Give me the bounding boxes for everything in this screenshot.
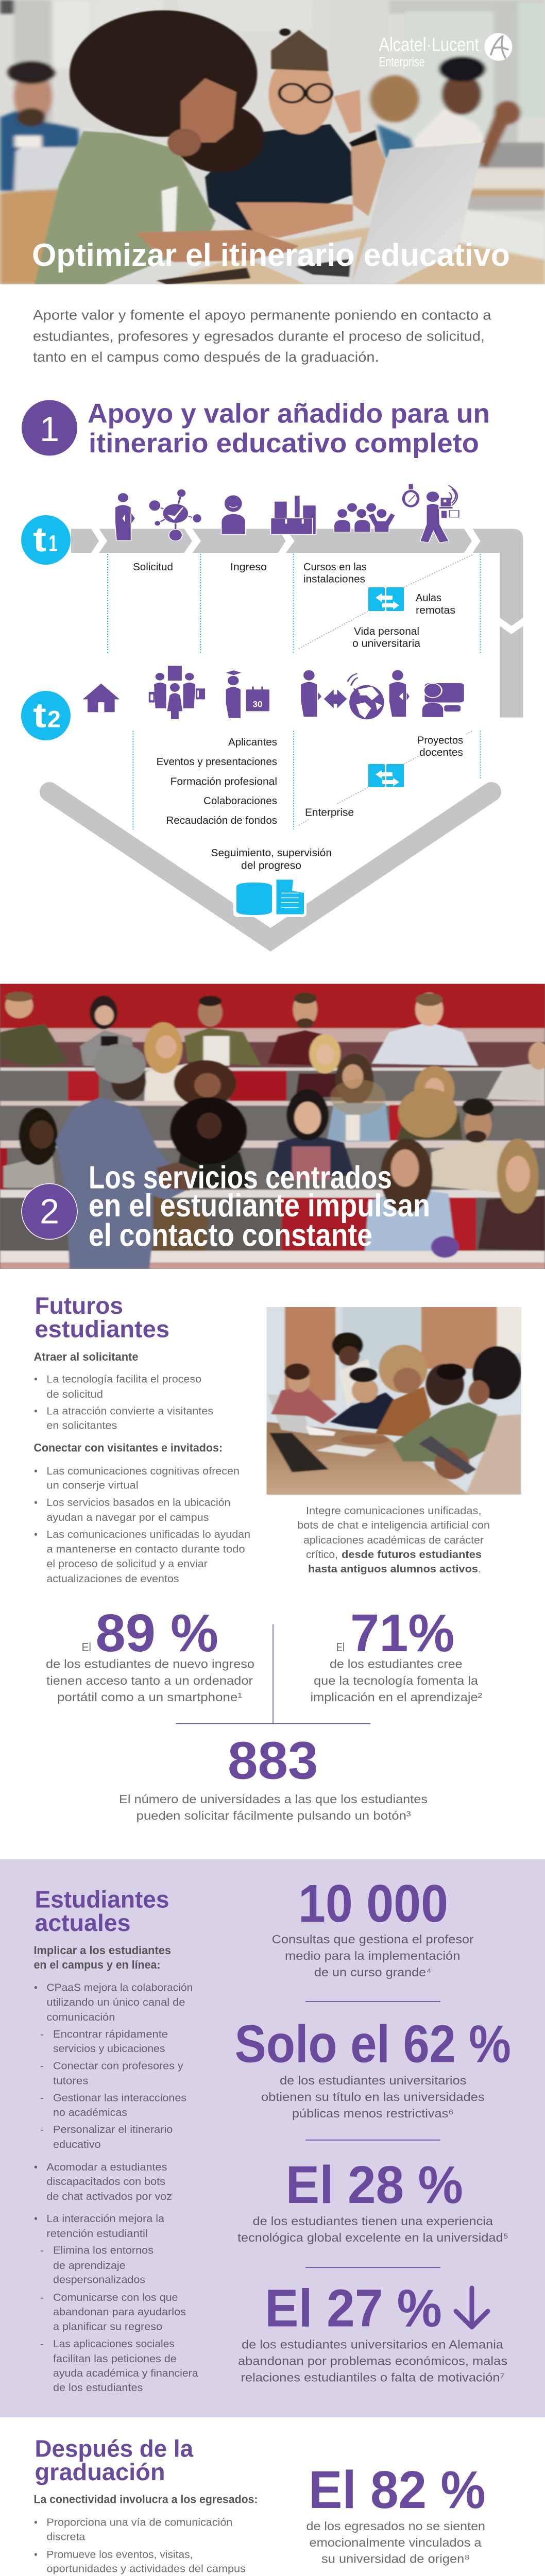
stat: 883: pueden solicitar fácilmente pulsando un botón³ bbox=[136, 1809, 411, 1822]
title: Optimizar el itinerario educativo bbox=[32, 238, 510, 273]
bullet list: connect: actualizaciones de eventos bbox=[46, 1573, 179, 1585]
bullet list: current students: - bbox=[40, 2292, 44, 2303]
icon: exchange (enterprise / teaching projects) bbox=[368, 764, 404, 787]
t2 stage labels: Recaudación de fondos bbox=[166, 815, 277, 826]
stat: el 82 %: El 82 % bbox=[309, 2460, 486, 2519]
bullet list: current students: Comunicarse con los que bbox=[53, 2292, 178, 2303]
bullet list: current students: - bbox=[40, 2061, 44, 2072]
photo caption: hasta antiguos alumnos activos bbox=[308, 1564, 478, 1575]
bullet list: current students: Elimina los entornos bbox=[53, 2245, 154, 2257]
heading: futuros estudiantes: estudiantes bbox=[35, 1316, 169, 1343]
bullet list: current students: tutores bbox=[53, 2076, 88, 2087]
icon: database and document bbox=[233, 878, 306, 917]
stat: el 27 % bbox=[238, 2279, 507, 2384]
bullet list: current students: ayuda académica y financiera bbox=[53, 2368, 199, 2379]
logo: Alcatel-Lucent Enterprise (header): Alcatel·Lucent bbox=[379, 34, 480, 55]
bullet list: current students: Las aplicaciones sociales bbox=[53, 2338, 175, 2350]
t1 stage labels: Aulas bbox=[416, 592, 441, 604]
stat: el 27 %: de los estudiantes universitarios en Alemania bbox=[242, 2338, 503, 2351]
stat: 10 000: de un curso grande⁴ bbox=[314, 1965, 432, 1979]
dotted guides bbox=[108, 554, 480, 829]
stat: el 82 % bbox=[306, 2460, 486, 2566]
stat: solo el 62 %: de los estudiantes universitarios bbox=[280, 2074, 467, 2087]
bullet list: connect: un conserje virtual bbox=[46, 1480, 139, 1492]
bullet list: attract: • bbox=[34, 1374, 38, 1385]
bullet list: connect: Las comunicaciones cognitivas ofrecen bbox=[46, 1466, 240, 1477]
stat: 89 %: 89 % bbox=[96, 1603, 218, 1663]
t2 icons row bbox=[82, 666, 464, 719]
bullet list: attract: La tecnología facilita el proceso bbox=[46, 1374, 201, 1385]
stat: 89 %: El bbox=[81, 1640, 91, 1654]
bullet list: connect: • bbox=[34, 1497, 38, 1509]
stat: 71 %: 71% bbox=[350, 1603, 454, 1663]
bullet list: current students: Conectar con profesores y bbox=[53, 2061, 183, 2072]
t1 stage labels bbox=[133, 562, 455, 650]
stat: 10 000: medio para la implementación bbox=[285, 1949, 460, 1962]
bullet list: current students: Gestionar las interacciones bbox=[53, 2093, 186, 2104]
bullet list: current students: de chat activados por voz bbox=[46, 2191, 172, 2202]
photo caption: crítico, bbox=[306, 1549, 338, 1561]
t2 stage labels: Colaboraciones bbox=[203, 795, 277, 807]
bullet list: current students: • bbox=[34, 2162, 38, 2173]
heading: estudiantes actuales: actuales bbox=[35, 1909, 131, 1936]
t2 stage labels: del progreso bbox=[241, 860, 301, 872]
photo: group around a table bbox=[267, 1307, 521, 1495]
bullet list: attract: • bbox=[34, 1406, 38, 1417]
intro text: estudiantes, profesores y egresados durante el proceso de solicitud, bbox=[33, 329, 485, 344]
calendar date on icon: 30 bbox=[253, 700, 262, 709]
bullet list: connect: a mantenerse en contacto durante todo bbox=[46, 1544, 245, 1555]
bullet list: connectivity: Promueve los eventos, visitas, bbox=[46, 2549, 193, 2561]
t1 stage labels: Vida personal bbox=[354, 626, 419, 637]
section 2 heading: en el estudiante impulsan bbox=[89, 1188, 430, 1224]
bullet list: connect: Los servicios basados en la ubicación bbox=[46, 1497, 230, 1509]
bullet list: current students: - bbox=[40, 2338, 44, 2350]
t1 icons row bbox=[115, 484, 459, 543]
heading: despues de la graduacion bbox=[35, 2435, 193, 2485]
bullet list: current students: - bbox=[40, 2029, 44, 2040]
stat: el 27 %: relaciones estudiantiles o falta de motivación⁷ bbox=[241, 2371, 505, 2384]
section 1 heading: Apoyo y valor añadido para un bbox=[88, 399, 490, 429]
stat: el 82 %: de los egresados no se sienten bbox=[306, 2519, 485, 2533]
section 1 number badge: 1 bbox=[40, 410, 59, 449]
heading: estudiantes actuales bbox=[35, 1886, 169, 1936]
section 2 number badge: 2 bbox=[40, 1192, 59, 1231]
stat: 71 %: implicación en el aprendizaje² bbox=[310, 1690, 482, 1704]
section 1 heading bbox=[88, 399, 490, 459]
section 2 photo: lecture hall bbox=[0, 984, 545, 1269]
logo: Alcatel-Lucent Enterprise (header) bbox=[379, 33, 512, 70]
bullet list: connectivity: Proporciona una vía de comunicación bbox=[46, 2517, 232, 2529]
stat: 89 %: de los estudiantes de nuevo ingreso bbox=[46, 1657, 254, 1670]
stat: solo el 62 %: Solo el 62 % bbox=[235, 2014, 511, 2073]
t1 marker: 1 bbox=[48, 530, 58, 556]
photo caption bbox=[297, 1505, 490, 1575]
photo caption: . bbox=[478, 1564, 481, 1575]
section 2 heading: el contacto constante bbox=[89, 1218, 372, 1253]
bullet list: current students: educativo bbox=[53, 2139, 101, 2150]
bullet list: current students: Personalizar el itinerario bbox=[53, 2124, 173, 2136]
bullet list: current students: • bbox=[34, 2213, 38, 2225]
stat: 71 %: El bbox=[336, 1640, 345, 1654]
intro text: tanto en el campus como después de la graduación. bbox=[33, 349, 379, 365]
stat: 10 000: 10 000 bbox=[298, 1874, 448, 1933]
subheading: engage students: en el campus y en línea: bbox=[34, 1958, 161, 1971]
bullet list: current students: - bbox=[40, 2245, 44, 2257]
heading: despues de la graduacion: graduación bbox=[35, 2459, 165, 2485]
section 2 number badge bbox=[22, 1184, 77, 1240]
bullet list: connect: • bbox=[34, 1466, 38, 1477]
bullet list: current students: retención estudiantil bbox=[46, 2228, 148, 2240]
bullet list: connect bbox=[34, 1466, 250, 1585]
stat: 89 %: portátil como a un smartphone¹ bbox=[57, 1690, 242, 1704]
subheading: connect: Conectar con visitantes e invitados: bbox=[34, 1442, 223, 1454]
stat: el 28 %: tecnológica global excelente en la universidad⁵ bbox=[237, 2231, 508, 2244]
t1 stage labels: instalaciones bbox=[303, 574, 365, 585]
bullet list: attract bbox=[34, 1374, 213, 1432]
bullet list: current students bbox=[34, 1982, 199, 2394]
hero photo: students at a laptop bbox=[0, 0, 545, 284]
stat: 71 %: de los estudiantes cree bbox=[330, 1657, 463, 1670]
bullet list: current students: - bbox=[40, 2093, 44, 2104]
t1 stage labels: remotas bbox=[416, 605, 455, 616]
section 1 heading: itinerario educativo completo bbox=[89, 428, 479, 459]
panel: despues de la graduacion text bbox=[34, 2435, 258, 2576]
t1 stage labels: Cursos en las bbox=[303, 562, 367, 573]
stat: el 28 %: de los estudiantes tienen una experiencia bbox=[252, 2214, 493, 2228]
t2 marker: 2 bbox=[47, 706, 61, 733]
t2 stage labels: Formación profesional bbox=[171, 776, 277, 787]
panel: futuros estudiantes text bbox=[34, 1292, 250, 1585]
t1 stage labels: o universitaria bbox=[352, 638, 421, 650]
bullet list: current students: de aprendizaje bbox=[53, 2260, 126, 2272]
t2 marker bbox=[21, 691, 71, 740]
subheading: engage students: Implicar a los estudiantes bbox=[34, 1944, 171, 1957]
bullet list: current students: facilitan las peticiones de bbox=[53, 2353, 177, 2365]
journey band: chevron path with V return bbox=[49, 529, 523, 940]
stat: 10 000 bbox=[272, 1874, 474, 1979]
stat: solo el 62 % bbox=[235, 2014, 511, 2120]
t2 stage labels: Seguimiento, supervisión bbox=[211, 848, 332, 859]
section 1 number badge bbox=[22, 400, 77, 455]
bullet list: connect: ayudan a navegar por el campus bbox=[46, 1512, 209, 1523]
intro text: Aporte valor y fomente el apoyo permanente poniendo en contacto a bbox=[33, 307, 492, 323]
stat: 71 % bbox=[310, 1603, 482, 1704]
stat: 89 %: tienen acceso tanto a un ordenador bbox=[46, 1674, 253, 1687]
stat: 10 000: Consultas que gestiona el profesor bbox=[272, 1933, 474, 1946]
bullet list: current students: servicios y ubicaciones bbox=[53, 2043, 165, 2055]
subheading: attract applicant: Atraer al solicitante bbox=[34, 1350, 138, 1363]
bullet list: attract: en solicitantes bbox=[46, 1420, 117, 1432]
t1 marker: t bbox=[33, 520, 46, 559]
bullet list: current students: comunicación bbox=[46, 2012, 115, 2023]
stat: 71 %: que la tecnología fomenta la bbox=[314, 1674, 478, 1687]
stat: 883 bbox=[119, 1731, 428, 1822]
subheading: engage students bbox=[34, 1944, 171, 1971]
heading: estudiantes actuales: Estudiantes bbox=[35, 1886, 169, 1913]
photo caption: Integre comunicaciones unificadas, bbox=[306, 1505, 481, 1517]
bullet list: connectivity: oportunidades y actividades del campus bbox=[46, 2564, 246, 2575]
section 2 heading bbox=[89, 1160, 430, 1253]
bullet list: connectivity bbox=[34, 2517, 246, 2575]
photo caption: aplicaciones académicas de carácter bbox=[303, 1535, 484, 1546]
t2 stage labels bbox=[157, 735, 463, 872]
stat: 883: El número de universidades a las que los estudiantes bbox=[119, 1792, 428, 1806]
stat: 89 % bbox=[46, 1603, 254, 1704]
bullet list: connect: • bbox=[34, 1529, 38, 1540]
bullet list: current students: discapacitados con bots bbox=[46, 2176, 165, 2188]
bullet list: current students: CPaaS mejora la colaboración bbox=[46, 1982, 193, 1994]
subheading: connectivity: La conectividad involucra a los egresados: bbox=[34, 2493, 258, 2506]
arrow: down bbox=[456, 2288, 488, 2327]
t1 stage labels: Solicitud bbox=[133, 562, 173, 573]
bullet list: attract: La atracción convierte a visitantes bbox=[46, 1406, 213, 1417]
stat: solo el 62 %: obtienen su título en las universidades bbox=[261, 2090, 485, 2104]
section 2 heading: Los servicios centrados bbox=[89, 1160, 392, 1195]
heading: futuros estudiantes: Futuros bbox=[35, 1292, 123, 1319]
t1 stage labels: Ingreso bbox=[230, 562, 267, 573]
bullet list: connect: el proceso de solicitud y a enviar bbox=[46, 1558, 208, 1570]
photo caption: desde futuros estudiantes bbox=[342, 1549, 482, 1561]
heading: despues de la graduacion: Después de la bbox=[35, 2435, 193, 2462]
t2 stage labels: Aplicantes bbox=[228, 737, 277, 748]
stat: el 82 %: su universidad de origen⁸ bbox=[321, 2552, 470, 2566]
t2 stage labels: Proyectos bbox=[417, 735, 463, 746]
bullet list: current students: a planificar su regreso bbox=[53, 2321, 162, 2333]
logo: Alcatel-Lucent Enterprise (header): Enterprise bbox=[379, 55, 424, 70]
stat: el 27 %: abandonan por problemas económicos, malas bbox=[238, 2354, 507, 2367]
bullet list: connect: Las comunicaciones unificadas lo ayudan bbox=[46, 1529, 250, 1540]
stat: 883: 883 bbox=[228, 1731, 318, 1790]
panel: estudiantes actuales bbox=[0, 1859, 545, 2417]
bullet list: current students: utilizando un único canal de bbox=[46, 1997, 185, 2008]
stat: el 82 %: emocionalmente vinculados a bbox=[309, 2536, 482, 2549]
intro text bbox=[33, 307, 492, 365]
bullet list: current students: • bbox=[34, 1982, 38, 1994]
bullet list: current students: abandonan para ayudarlos bbox=[53, 2307, 186, 2318]
stat: el 27 %: El 27 % bbox=[265, 2279, 442, 2338]
icon: remote classrooms exchange bbox=[368, 587, 404, 611]
bullet list: current students: Encontrar rápidamente bbox=[53, 2029, 168, 2040]
heading: futuros estudiantes bbox=[35, 1292, 169, 1343]
photo caption: bots de chat e inteligencia artificial con bbox=[297, 1520, 490, 1531]
t2 marker: t bbox=[33, 696, 46, 735]
t2 stage labels: Eventos y presentaciones bbox=[157, 756, 277, 768]
bullet list: attract: de solicitud bbox=[46, 1389, 103, 1400]
bullet list: current students: de los estudiantes bbox=[53, 2382, 143, 2394]
t2 stage labels: docentes bbox=[419, 747, 463, 758]
bullet list: current students: Acomodar a estudiantes bbox=[46, 2162, 167, 2173]
bullet list: current students: despersonalizados bbox=[53, 2274, 145, 2285]
bullet list: current students: La interacción mejora la bbox=[46, 2213, 165, 2225]
bullet list: connectivity: • bbox=[34, 2549, 38, 2561]
stat: solo el 62 %: públicas menos restrictivas⁶ bbox=[292, 2107, 454, 2120]
stat: el 28 %: El 28 % bbox=[286, 2155, 463, 2214]
bullet list: current students: - bbox=[40, 2124, 44, 2136]
t1 marker bbox=[21, 515, 71, 565]
bullet list: current students: no académicas bbox=[53, 2107, 127, 2119]
stat: el 28 % bbox=[237, 2155, 508, 2244]
t2 stage labels: Enterprise bbox=[305, 807, 354, 819]
bullet list: connectivity: discreta bbox=[46, 2531, 86, 2543]
bullet list: connectivity: • bbox=[34, 2517, 38, 2529]
